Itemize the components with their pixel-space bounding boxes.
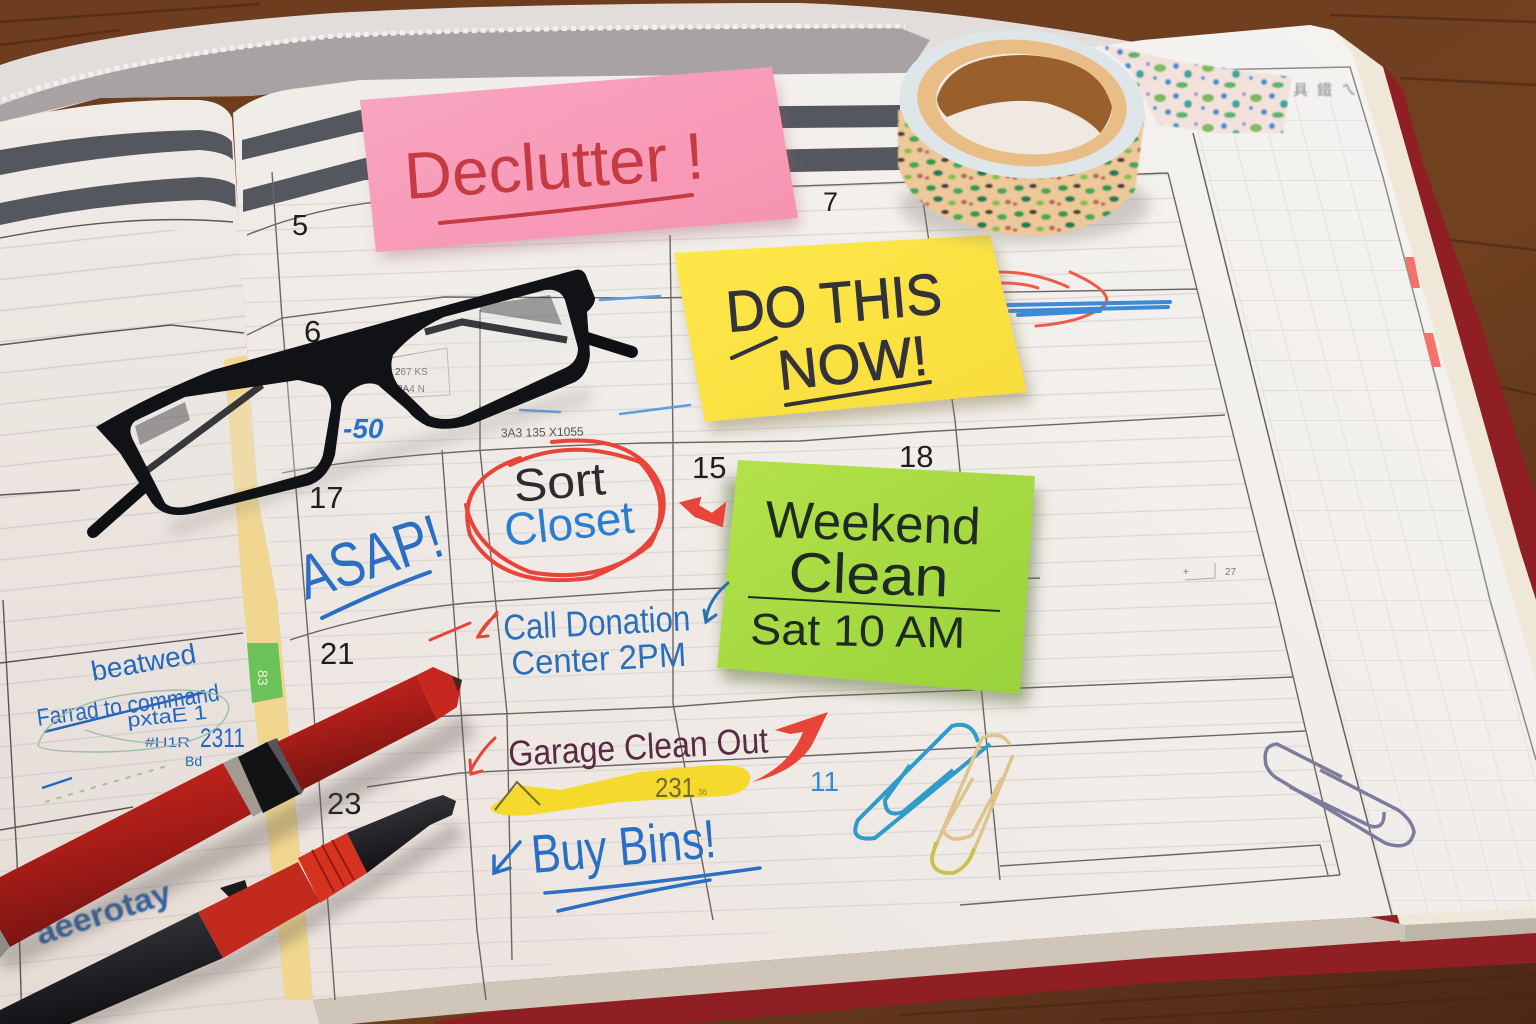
left page handwritten notes: Bd — [185, 753, 202, 769]
small printed notes: 267 KS — [395, 367, 428, 378]
blue number written under glasses: -50 — [343, 413, 384, 444]
cardboard core interior — [937, 55, 1112, 133]
header stripes — [242, 105, 900, 212]
blurred notes under the pens: aeerotay — [31, 874, 176, 952]
ribbed red section — [298, 833, 367, 903]
index tabs on grid page — [1405, 257, 1420, 288]
circled task: Sort Closet: Closet — [502, 491, 637, 556]
calendar grid and rules — [230, 105, 1360, 1010]
left planner page: 83 — [255, 670, 271, 686]
date numbers: 17 — [309, 480, 343, 515]
red curved arrow — [752, 712, 828, 782]
task: Buy Bins: Buy Bins! — [529, 809, 718, 885]
grid page header: 具鐵ㄟ — [1293, 81, 1365, 99]
task: Call Donation Center — [430, 583, 728, 683]
date numbers: 7 — [823, 187, 838, 217]
temple arm tips — [93, 338, 632, 532]
task: Call Donation Center: Center 2PM — [510, 636, 687, 683]
left page handwritten notes: beatwed — [89, 638, 198, 687]
left page handwritten notes: 2311 — [200, 723, 245, 753]
page block edge — [313, 917, 1405, 1024]
date numbers — [292, 187, 933, 821]
blue paper clip — [855, 725, 990, 839]
red body — [198, 862, 320, 958]
blue and red marks under yellow note — [520, 272, 1170, 414]
red arrow to Sort Closet — [681, 498, 725, 526]
yellow highlight: 36 — [698, 788, 707, 797]
date numbers: 5 — [292, 210, 308, 242]
sticky note: Declutter: Declutter ! — [402, 118, 706, 213]
sticky note: Do this now — [674, 235, 1032, 432]
date numbers: 21 — [320, 636, 354, 671]
pen barrel — [0, 763, 253, 947]
black tip — [347, 795, 456, 873]
left header stripes — [0, 130, 236, 225]
date numbers: 18 — [899, 439, 933, 474]
glasses — [93, 270, 632, 532]
grey paper clip — [1265, 744, 1414, 846]
red planner cover — [430, 65, 1536, 1024]
right page stack edge — [1143, 30, 1536, 942]
small printed notes: 27 — [1225, 567, 1237, 578]
date numbers: 6 — [304, 314, 321, 349]
blue note: 11: 11 — [810, 766, 839, 797]
yellow highlight — [490, 765, 750, 816]
tape shadow — [900, 167, 1150, 243]
left page handwritten notes: pxtaE 1 — [126, 702, 208, 732]
left page handwritten notes: #H1R — [145, 734, 190, 750]
left planner page — [0, 100, 330, 1024]
sticky note: Weekend Clean: Sat 10 AM — [750, 605, 966, 658]
grip — [0, 912, 223, 1024]
sticky note: Do this now: DO THIS — [723, 261, 944, 345]
date numbers: 15 — [692, 450, 726, 485]
red marker pen — [0, 667, 470, 960]
temple arms seen through lenses — [145, 322, 567, 472]
circled task: Sort Closet — [466, 441, 664, 580]
gold paper clip — [932, 735, 1013, 873]
fabric zipper pouch at top — [0, 3, 1150, 125]
calendar lines — [247, 172, 1340, 1000]
sticky note: Weekend Clean — [717, 460, 1040, 705]
date numbers: 23 — [327, 786, 361, 821]
outer side of the roll — [898, 110, 1145, 236]
yellow highlight: 231 — [655, 772, 695, 803]
silver band — [223, 755, 267, 817]
left page handwritten notes — [31, 638, 245, 952]
frame — [96, 270, 595, 515]
washi tape roll — [893, 20, 1292, 243]
small printed notes: 2A4 N — [397, 384, 425, 395]
small printed notes: + — [1183, 567, 1189, 578]
sticky note: Do this now: NOW! — [775, 324, 930, 402]
task: Call Donation Center: Call Donation — [502, 597, 691, 648]
roll top face — [893, 20, 1151, 188]
task: Garage Clean Out: Garage Clean Out — [507, 719, 769, 774]
circled task: Sort Closet: Sort — [511, 452, 608, 512]
tape tail — [1097, 43, 1292, 133]
task: Buy Bins — [494, 809, 760, 911]
sticky note: Weekend Clean: Clean — [788, 540, 950, 609]
black band — [238, 742, 302, 813]
left page handwritten notes: Farrad to command — [35, 680, 221, 732]
small printed notes — [390, 348, 1237, 578]
sticky note: Declutter — [360, 67, 800, 258]
coloured index tab strip — [224, 355, 315, 1000]
handwritten: ASAP: ASAP! — [289, 502, 451, 613]
lenses — [131, 297, 578, 507]
cap — [277, 675, 437, 790]
small printed notes: 3A3 135 X1055 — [501, 425, 584, 440]
grid sheet — [1193, 100, 1536, 915]
sticky note: Weekend Clean: Weekend — [765, 491, 981, 556]
black and red pen — [0, 795, 460, 1024]
